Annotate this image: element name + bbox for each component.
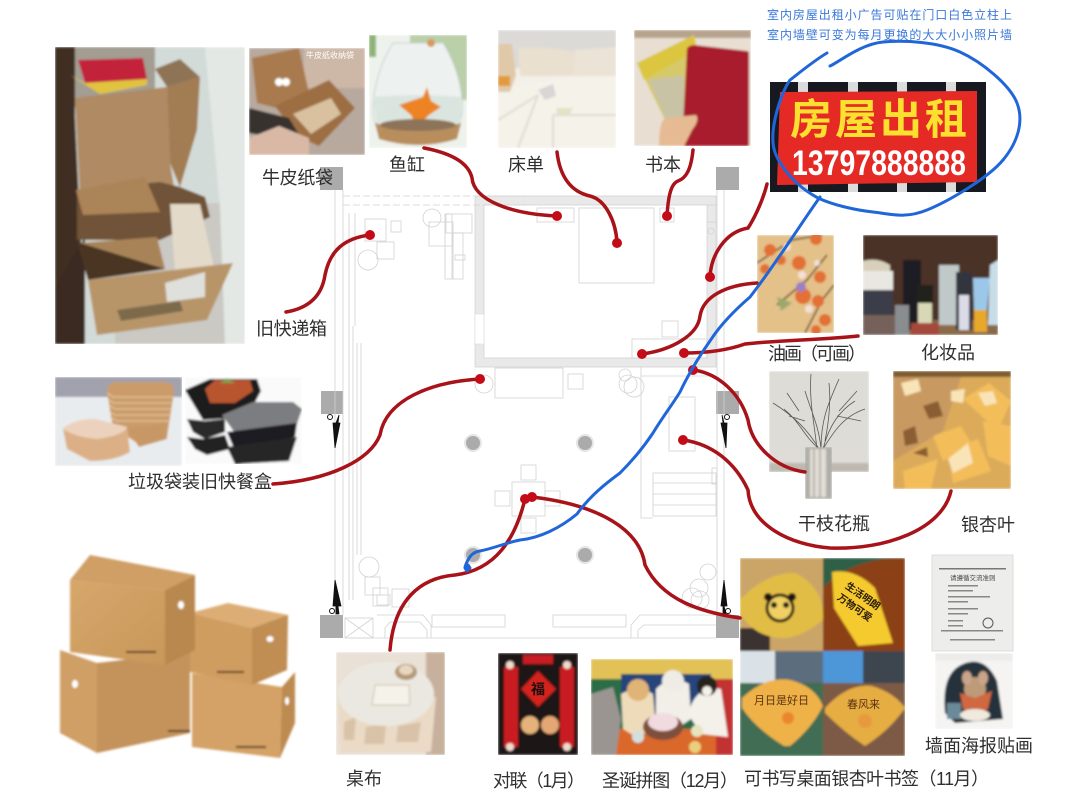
blue annotation line and circle — [465, 41, 1020, 571]
floor plan — [320, 167, 739, 638]
connector: table cloth — [390, 494, 530, 650]
photo: fish bowl — [369, 35, 467, 148]
structural columns — [320, 167, 739, 638]
label: books: 书本 — [645, 155, 681, 175]
bookmark inscriptions — [754, 693, 880, 711]
bedroom walls — [475, 196, 716, 367]
advert headline: 房屋出租 — [790, 96, 967, 143]
label: express boxes: 旧快递箱 — [256, 319, 327, 339]
connector: bookmarks — [527, 492, 740, 618]
poster: room for rent advert — [770, 82, 986, 192]
label: bookmarks: 可书写桌面银杏叶书签（11月） — [744, 769, 989, 789]
label: bed sheets: 床单 — [508, 155, 544, 175]
advert phone number: 13797888888 — [792, 144, 966, 183]
poster: exchange notice — [932, 555, 1013, 651]
blue note line 1: 室内房屋出租小广告可贴在门口白色立柱上 — [767, 7, 1012, 22]
connector: cosmetics — [679, 336, 858, 358]
connector: rental advert — [705, 184, 767, 282]
connector: dried branch vase — [688, 365, 805, 472]
label: table cloth: 桌布 — [346, 769, 382, 789]
label: food boxes: 垃圾袋装旧快餐盒 — [128, 472, 272, 492]
bookmark black lettering: 生活明朗 — [843, 579, 883, 613]
connector: painting — [637, 283, 757, 359]
plan lines — [335, 190, 724, 638]
fu character: 福 — [531, 681, 545, 697]
bag caption text: 牛皮纸收纳袋 — [306, 50, 354, 60]
photo: dried branches — [769, 371, 869, 472]
bookmark black lettering: 万物可爱 — [835, 591, 875, 624]
poster: mouse reading sticker — [935, 653, 1013, 728]
label: wall sticker: 墙面海报贴画 — [925, 736, 1033, 756]
photo: black takeaway boxes — [185, 377, 302, 464]
photo: bed sheets — [498, 30, 616, 148]
photo: flower vase — [805, 447, 832, 499]
bottom-right box — [192, 673, 282, 758]
photo: stacked cardboard boxes — [60, 555, 295, 758]
door arrows — [328, 414, 730, 614]
label: kraft bag: 牛皮纸袋 — [262, 168, 333, 188]
photo: ginkgo leaf pile — [893, 371, 1011, 489]
photo: spring couplets — [498, 653, 578, 755]
connector: bed sheets — [557, 152, 622, 248]
photo: persimmon painting — [757, 235, 834, 333]
photo: old express boxes — [55, 47, 245, 344]
photo: table cloth — [336, 652, 445, 755]
label: fish bowl: 鱼缸 — [389, 154, 425, 175]
photo: christmas cats puzzle — [591, 659, 733, 755]
photo: ginkgo bookmarks — [740, 558, 905, 756]
label: couplets: 对联（1月） — [493, 771, 585, 791]
connector: food boxes — [273, 374, 485, 484]
bookmark black lettering — [835, 579, 883, 624]
bottom-left box — [60, 650, 97, 753]
top-right box — [190, 603, 288, 628]
photo: books — [634, 30, 751, 146]
photo: cosmetics — [863, 235, 998, 335]
connector: express boxes — [286, 230, 375, 312]
connector: books — [662, 150, 693, 221]
blue note line 2: 室内墙壁可变为每月更换的大大小小照片墙 — [767, 27, 1012, 42]
label: cosmetics: 化妆品 — [921, 343, 975, 363]
label: vase: 干枝花瓶 — [798, 514, 870, 534]
bookmark inscriptions: 月日是好日 — [754, 693, 809, 707]
label: ginkgo leaves: 银杏叶 — [961, 515, 1015, 535]
connector: ginkgo leaves — [678, 435, 951, 548]
notice title: 请遵循交流准则 — [950, 573, 996, 582]
connector: fish bowl — [424, 148, 562, 221]
photo: kraft storage bag — [249, 48, 365, 155]
box marks — [72, 601, 289, 705]
top-left box — [70, 555, 195, 590]
label: painting: 油画（可画） — [768, 344, 866, 364]
photo: kraft food boxes — [55, 377, 182, 466]
bookmark inscriptions: 春风来 — [847, 698, 880, 711]
label: christmas puzzle: 圣诞拼图（12月） — [602, 771, 738, 791]
ceiling column dots — [465, 435, 593, 563]
